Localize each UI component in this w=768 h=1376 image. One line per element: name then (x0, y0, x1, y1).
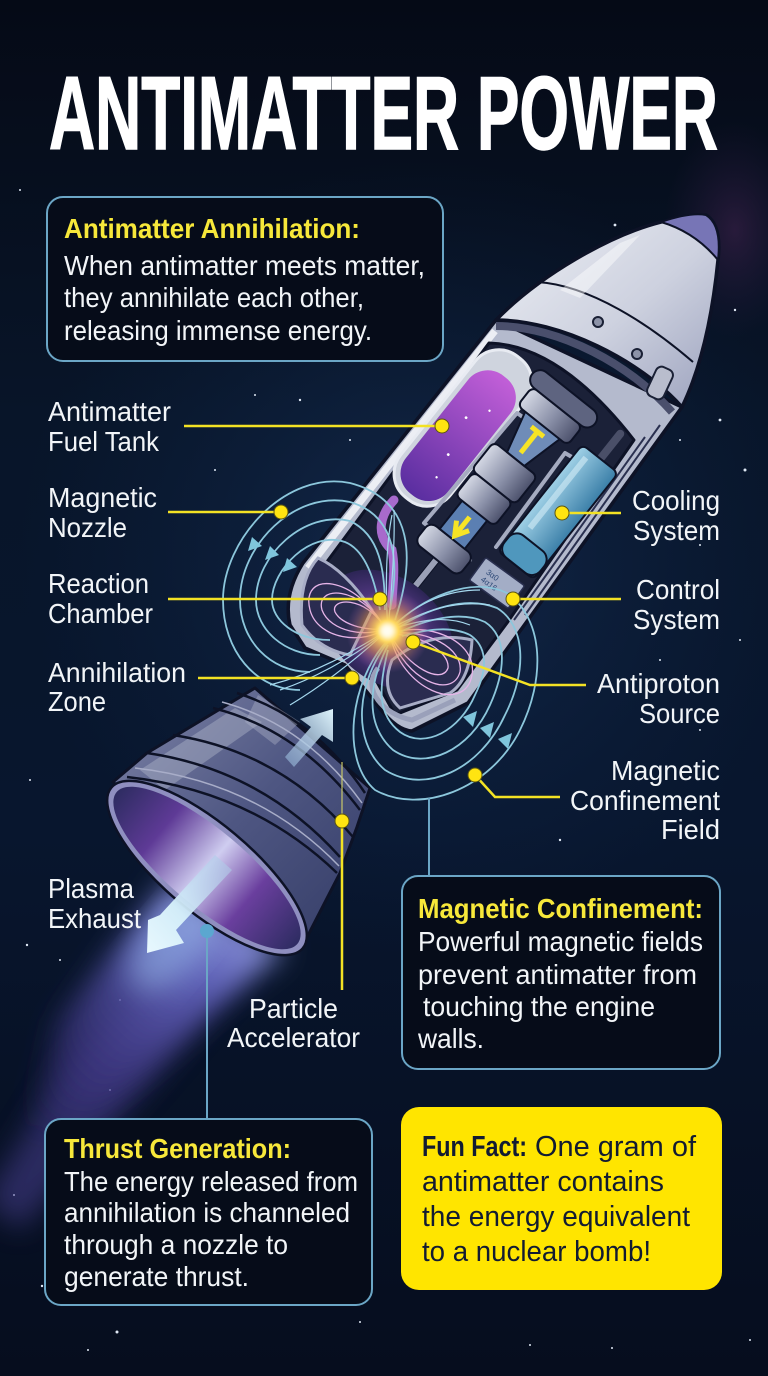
callout: magnetic confinement: touching the engine (423, 991, 655, 1022)
callout: antimatter annihilation: Antimatter Annihilation: (64, 213, 360, 244)
magnetic nozzle pipe (381, 500, 394, 605)
nozzle mouth (83, 754, 331, 982)
callout: antimatter annihilation: they annihilate each other, (64, 282, 364, 313)
callout: fun fact: One gram of (535, 1131, 697, 1163)
leader: magnetic nozzle (48, 482, 288, 543)
field lines through the core (270, 510, 490, 705)
thrust arrow up (285, 709, 333, 767)
leader: particle accelerator: Particle (249, 993, 338, 1024)
rocket interior (305, 343, 634, 715)
rocket nozzle (113, 688, 370, 945)
callout: thrust generation: The energy released from (64, 1166, 358, 1197)
leader: antiproton source (406, 635, 720, 729)
callout: magnetic confinement: Magnetic Confinement: (418, 893, 703, 924)
callout: magnetic confinement (402, 876, 720, 1069)
leader: antiproton source: Source (639, 698, 720, 729)
connector: thrust generation callout (200, 924, 214, 1119)
callout: magnetic confinement: Powerful magnetic fields (418, 926, 703, 957)
callout: thrust generation: Thrust Generation: (64, 1133, 291, 1164)
label: plasma exhaust: Exhaust (48, 903, 141, 934)
leader: antiproton source: Antiproton (597, 668, 720, 699)
leader: cooling system: Cooling (632, 485, 720, 516)
leader: magnetic confinement field (468, 755, 720, 845)
callout: antimatter annihilation: When antimatter meets matter, (64, 250, 425, 281)
annihilation glow (346, 589, 430, 673)
control system chip: 3α0 (484, 568, 501, 583)
leader: control system (506, 574, 720, 635)
leader: antimatter fuel tank: Antimatter (48, 396, 171, 427)
callout: fun fact (401, 1107, 722, 1290)
plasma exhaust arrow (147, 855, 232, 953)
leader: cooling system (555, 485, 720, 546)
callout: antimatter annihilation: releasing immense energy. (64, 315, 372, 346)
callout: fun fact: to a nuclear bomb! (422, 1236, 651, 1268)
leader: magnetic nozzle: Magnetic (48, 482, 157, 513)
leader: reaction chamber: Reaction (48, 568, 149, 599)
callout: magnetic confinement: prevent antimatter from (418, 959, 697, 990)
leader: particle accelerator: Accelerator (227, 1022, 360, 1053)
callout: thrust generation: through a nozzle to (64, 1229, 288, 1260)
leader: antimatter fuel tank: Fuel Tank (48, 426, 160, 457)
callout: thrust generation: annihilation is channeled (64, 1197, 350, 1228)
label: plasma exhaust (48, 873, 141, 934)
leader: control system: System (633, 604, 720, 635)
label: plasma exhaust: Plasma (48, 873, 134, 904)
callout: fun fact: the energy equivalent (422, 1201, 690, 1233)
body highlight (308, 331, 495, 568)
leader: annihilation zone (48, 657, 359, 717)
leader: magnetic nozzle: Nozzle (48, 512, 127, 543)
callout: antimatter annihilation (47, 197, 443, 361)
field line arrowheads (248, 537, 512, 749)
pink coils (309, 584, 472, 695)
callout: fun fact: antimatter contains (422, 1166, 664, 1198)
leader: annihilation zone: Zone (48, 686, 106, 717)
callout: thrust generation (45, 1119, 372, 1305)
accelerator assembly (384, 366, 601, 611)
leader: particle accelerator (227, 762, 360, 1053)
magnetic confinement field lines (223, 481, 537, 800)
control system chip: 4α16 (479, 575, 499, 593)
leader: magnetic confinement field: Field (661, 814, 720, 845)
leader: cooling system: System (633, 515, 720, 546)
antimatter fuel tank (382, 338, 544, 518)
cooling system (498, 416, 641, 580)
leader: reaction chamber (48, 568, 387, 629)
plasma exhaust plume (0, 880, 285, 1230)
leader: control system: Control (636, 574, 720, 605)
reaction chamber (299, 545, 477, 720)
connector: magnetic confinement callout (428, 798, 430, 876)
leader: magnetic confinement field: Magnetic (611, 755, 720, 786)
callout: fun fact: Fun Fact: (422, 1131, 527, 1163)
body right wall stripes (514, 425, 660, 620)
leader: antimatter fuel tank (48, 396, 449, 457)
leader: magnetic confinement field: Confinement (570, 785, 720, 816)
rocket body shell (288, 320, 682, 731)
control system chip (469, 558, 525, 608)
leader: annihilation zone: Annihilation (48, 657, 186, 688)
callout: magnetic confinement: walls. (417, 1023, 484, 1054)
callout: thrust generation: generate thrust. (64, 1261, 249, 1292)
nose cone (496, 214, 719, 412)
leader: reaction chamber: Chamber (48, 598, 153, 629)
compartment frame (424, 413, 577, 560)
